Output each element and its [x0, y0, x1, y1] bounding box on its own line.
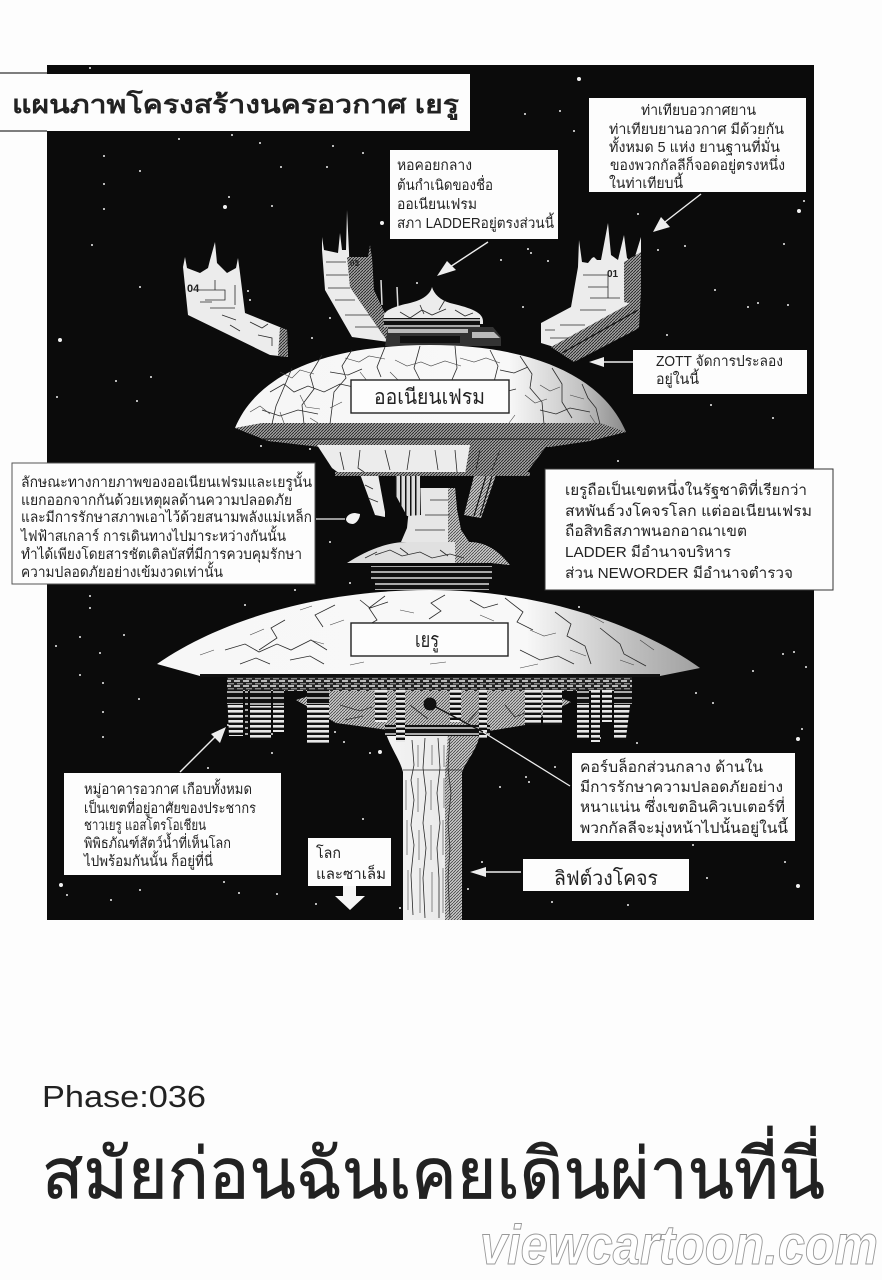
- callout: core block: มีการรักษาความปลอดภัยอย่าง: [580, 779, 783, 796]
- callout: political status: เยรูถือเป็นเขตหนึ่งในรัฐชาติที่เรียกว่า: [565, 479, 807, 499]
- callout: political status: LADDER มีอำนาจบริหาร: [565, 544, 731, 561]
- station: neck and small dome: [347, 488, 510, 590]
- callout: docks: ทั้งหมด 5 แห่ง ยานฐานที่มั่น: [609, 136, 780, 156]
- callout: central tower: สภา LADDERอยู่ตรงส่วนนี้: [397, 212, 554, 232]
- station: yeru dome: [157, 590, 700, 676]
- callout: residential towers: [64, 773, 281, 875]
- station: dock 01: [541, 223, 641, 362]
- callout: central tower: [390, 150, 558, 239]
- callout: political status: ส่วน NEWORDER มีอำนาจตำรวจ: [565, 565, 793, 582]
- callout: ZOTT: ZOTT จัดการประลอง: [656, 354, 783, 370]
- station: dock 04: [183, 242, 288, 357]
- station: oceanframe dome: [235, 345, 626, 476]
- callout: ZOTT: [633, 350, 807, 394]
- station: dock 02: 03: [350, 259, 359, 268]
- callout: physical separation: และมีการรักษาสภาพเอาไว้ด้วยสนามพลังแม่เหล็ก: [21, 507, 312, 526]
- callout: residential towers: พิพิธภัณฑ์สัตว์น้ำที่เห็นโลก: [84, 832, 231, 852]
- title: [0, 73, 470, 131]
- callout: central tower: ต้นกำเนิดของชื่อ: [397, 175, 493, 194]
- callout: docks: [589, 98, 806, 192]
- callout: earth and salem: โลก: [316, 844, 341, 862]
- label: yeru: [351, 623, 508, 656]
- callout: physical separation: ทำได้เพียงโดยสารชัตเติลบัสที่มีการควบคุมรักษา: [21, 544, 302, 563]
- station: dock 01: 01: [607, 269, 619, 280]
- stars: [56, 68, 806, 908]
- station: dock 04: 04: [187, 283, 200, 295]
- core block marker and line: [424, 698, 570, 786]
- label: oceanframe: [351, 380, 509, 413]
- callout: political status: ถือสิทธิสภาพนอกอาณาเขต: [565, 523, 747, 540]
- label: oceanframe: ออเนียนเฟรม: [374, 386, 485, 409]
- label: yeru: เยรู: [415, 629, 439, 653]
- callout: docks: ของพวกกัลลีก็จอดอยู่ตรงหนึ่ง: [610, 155, 785, 174]
- arrow: residential towers: [180, 727, 226, 772]
- arrow: ZOTT: [589, 357, 633, 367]
- callout: central tower: หอคอยกลาง: [397, 158, 472, 174]
- callout: orbital lift: [523, 859, 689, 891]
- station: dock 02: [322, 210, 398, 342]
- callout: core block: พวกกัลลีจะมุ่งหน้าไปนั้นอยู่ในนี้: [580, 817, 788, 838]
- chapter title: สมัยก่อนฉันเคยเดินผ่านที่นี่: [42, 1126, 825, 1213]
- callout: physical separation: [12, 463, 315, 584]
- arrow: orbital lift: [470, 867, 521, 877]
- callout: orbital lift: ลิฟต์วงโคจร: [554, 867, 658, 890]
- arrow: down to earth: [335, 886, 365, 910]
- callout: political status: [545, 469, 833, 590]
- callout: core block: คอร์บล็อกส่วนกลาง ด้านใน: [580, 757, 763, 776]
- panel: space background: [47, 65, 814, 920]
- callout: physical separation: ไฟฟ้าสเกลาร์ การเดินทางไปมาระหว่างกันนั้น: [20, 525, 286, 545]
- callout: physical separation: ลักษณะทางกายภาพของออเนียนเฟรมและเยรูนั้น: [21, 471, 312, 491]
- callout: earth and salem: และซาเล็ม: [316, 864, 386, 883]
- arrow: central tower: [437, 242, 488, 276]
- callout: physical separation: แยกออกจากกันด้วยเหตุผลด้านความปลอดภัย: [21, 492, 292, 509]
- callout: core block: [572, 753, 795, 841]
- station: yeru lower tower: [386, 734, 480, 920]
- title: แผนภาพโครงสร้างนครอวกาศ เยรู: [12, 89, 460, 121]
- arrow: docks: [653, 194, 701, 232]
- station: support legs: [360, 472, 497, 518]
- callout: physical separation: ความปลอดภัยอย่างเข้มงวดเท่านั้น: [21, 561, 223, 581]
- callout: earth and salem: [308, 838, 391, 886]
- callout: political status: สหพันธ์วงโคจรโลก แต่ออเนียนเฟรม: [565, 502, 812, 520]
- station: hull and habitat towers: [200, 674, 660, 743]
- callout: ZOTT: อยู่ในนี้: [656, 368, 699, 388]
- callout: residential towers: ไปพร้อมกันนั้น ก็อยู่ที่นี่: [83, 850, 213, 870]
- icon: shuttle marker: [316, 513, 360, 524]
- callout: docks: ท่าเทียบยานอวกาศ มีด้วยกัน: [609, 121, 784, 138]
- callout: central tower: ออเนียนเฟรม: [397, 196, 477, 213]
- callout: core block: หนาแน่น ซึ่งเขตอินคิวเบเตอร์ที่: [580, 796, 785, 816]
- callout: docks: ท่าเทียบอวกาศยาน: [641, 102, 756, 119]
- callout: residential towers: ชาวเยรู แอสโตรโอเชียน: [84, 816, 206, 834]
- callout: residential towers: เป็นเขตที่อยู่อาศัยของประชากร: [84, 798, 256, 817]
- callout: docks: ในท่าเทียบนี้: [609, 172, 683, 192]
- station: central tower top: [384, 287, 501, 346]
- callout: residential towers: หมู่อาคารอวกาศ เกือบทั้งหมด: [84, 778, 252, 798]
- chapter number: Phase:036: [42, 1079, 206, 1114]
